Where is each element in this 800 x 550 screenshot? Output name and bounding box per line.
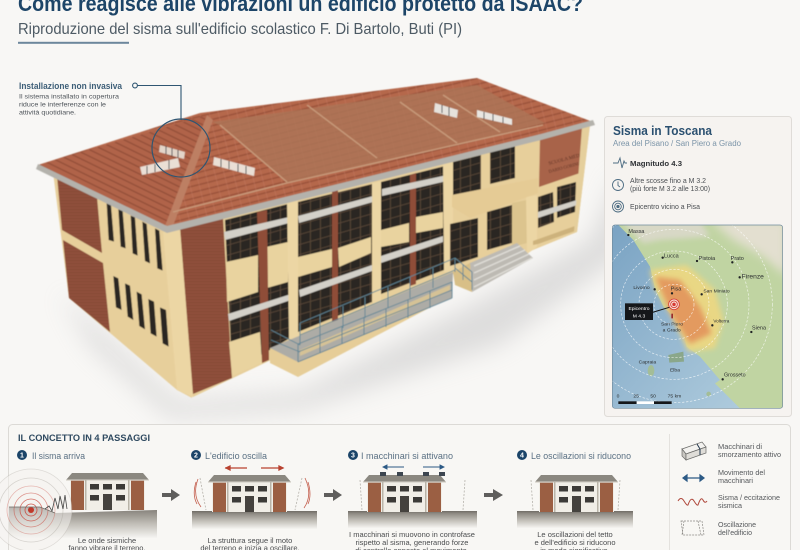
- legend: Macchinari di: [718, 442, 762, 451]
- map of Tuscany: Massa: [628, 229, 645, 235]
- map of Tuscany: San Miniato: [703, 288, 730, 294]
- step 2: [191, 450, 317, 550]
- icon: damping machine: [682, 442, 706, 460]
- callout: non invasive installation: Il sistema installato in copertura: [19, 94, 119, 100]
- step 1: [0, 450, 157, 550]
- map of Tuscany: Capraia: [639, 360, 656, 366]
- callout: non invasive installation: riduce le interferenze con le: [19, 102, 106, 108]
- arrow: [484, 489, 503, 501]
- map of Tuscany: Epicentro: [628, 306, 650, 312]
- panel: Sisma in Toscana: Magnitudo 4.3: [630, 159, 682, 168]
- step 3: rispetto al sisma, generando forze: [356, 538, 468, 547]
- map of Tuscany: 0: [617, 393, 620, 399]
- map of Tuscany: Livorno: [633, 285, 650, 291]
- map of Tuscany: San Piero: [661, 321, 683, 327]
- step 3: I macchinari si attivano: [361, 451, 453, 461]
- panel: Sisma in Toscana: Epicentro vicino a Pisa: [630, 202, 701, 211]
- icon: machine movement arrow: [683, 475, 704, 481]
- map of Tuscany: Prato: [731, 256, 744, 262]
- step 3: I macchinari si muovono in controfase: [349, 530, 475, 539]
- icon: seismic wave: [678, 498, 707, 505]
- icon: clock: [612, 180, 624, 190]
- map of Tuscany: Pisa: [671, 286, 682, 292]
- map of Tuscany: Lucca: [664, 253, 680, 259]
- map of Tuscany: a Grado: [663, 328, 681, 334]
- map of Tuscany: M 4.3: [633, 313, 645, 319]
- panel: Sisma in Toscana: [604, 116, 792, 417]
- subtitle: Riproduzione del sisma sull'edificio scolastico F. Di Bartolo, Buti (PI): [18, 21, 462, 38]
- map of Tuscany: Volterra: [713, 319, 730, 324]
- callout: non invasive installation: attività quotidiane.: [19, 110, 76, 116]
- step 2: L'edificio oscilla: [205, 451, 267, 461]
- callout: non invasive installation: Installazione non invasiva: [19, 81, 123, 91]
- map of Tuscany: [612, 224, 783, 409]
- map of Tuscany: Elba: [670, 368, 680, 374]
- damping machines on the roof: [140, 103, 512, 176]
- building illustration: [36, 78, 630, 418]
- panel: Sisma in Toscana: (più forte M 3.2 alle 13:00): [630, 184, 710, 193]
- map of Tuscany: Grosseto: [724, 373, 746, 379]
- map of Tuscany: 75 km: [668, 393, 681, 399]
- map of Tuscany: Firenze: [742, 274, 764, 281]
- map of Tuscany: 50: [650, 393, 656, 399]
- step 2: 2: [194, 452, 198, 460]
- step 2: La struttura segue il moto: [208, 536, 292, 545]
- front facade: [163, 125, 590, 397]
- step 4: e dell'edificio si riducono: [534, 538, 616, 547]
- step 4: Le oscillazioni si riducono: [531, 451, 631, 461]
- roof: [36, 78, 595, 233]
- arrow: [162, 489, 180, 501]
- step 1: Le onde sismiche: [78, 536, 136, 545]
- icon: seismograph: [613, 158, 627, 168]
- step 4: Le oscillazioni del tetto: [537, 530, 613, 539]
- legend: [678, 442, 781, 537]
- stairs: [453, 243, 533, 292]
- panel: il concetto in 4 passaggi: IL CONCETTO IN 4 PASSAGGI: [18, 433, 150, 444]
- legend: smorzamento attivo: [718, 450, 781, 459]
- step 1: Il sisma arriva: [32, 451, 85, 461]
- map of Tuscany: Pistoia: [699, 256, 716, 262]
- icon: epicentre target: [612, 201, 624, 212]
- icon: building oscillation: [681, 521, 704, 535]
- left wall: [53, 172, 192, 398]
- map of Tuscany: Siena: [752, 325, 767, 331]
- sign panel: SCUOLA MEDIA: [548, 152, 586, 167]
- callout: non invasive installation: [19, 81, 210, 177]
- step 4: 4: [520, 452, 524, 460]
- legend: Oscillazione: [718, 520, 756, 529]
- sign panel: DARIO GORINI: [548, 161, 580, 174]
- sign panel: [539, 127, 586, 187]
- access ramp: [270, 258, 472, 377]
- legend: dell'edificio: [718, 528, 752, 537]
- map of Tuscany: 25: [633, 393, 639, 399]
- panel: Sisma in Toscana: Sisma in Toscana: [613, 123, 713, 138]
- step 1: 1: [20, 452, 24, 460]
- panel: Sisma in Toscana: Area del Pisano / San Piero a Grado: [613, 139, 742, 148]
- legend: Sisma / eccitazione: [718, 493, 780, 502]
- balcony: [452, 178, 538, 218]
- legend: sismica: [718, 501, 743, 510]
- legend: Movimento del: [718, 468, 765, 477]
- step 3: [348, 450, 477, 550]
- arrow: [324, 489, 342, 501]
- legend: macchinari: [718, 476, 753, 485]
- step 3: 3: [351, 452, 355, 460]
- step 4: [517, 450, 633, 550]
- panel: Sisma in Toscana: Altre scosse fino a M 3.2: [630, 176, 706, 185]
- panel: il concetto in 4 passaggi: [0, 424, 790, 550]
